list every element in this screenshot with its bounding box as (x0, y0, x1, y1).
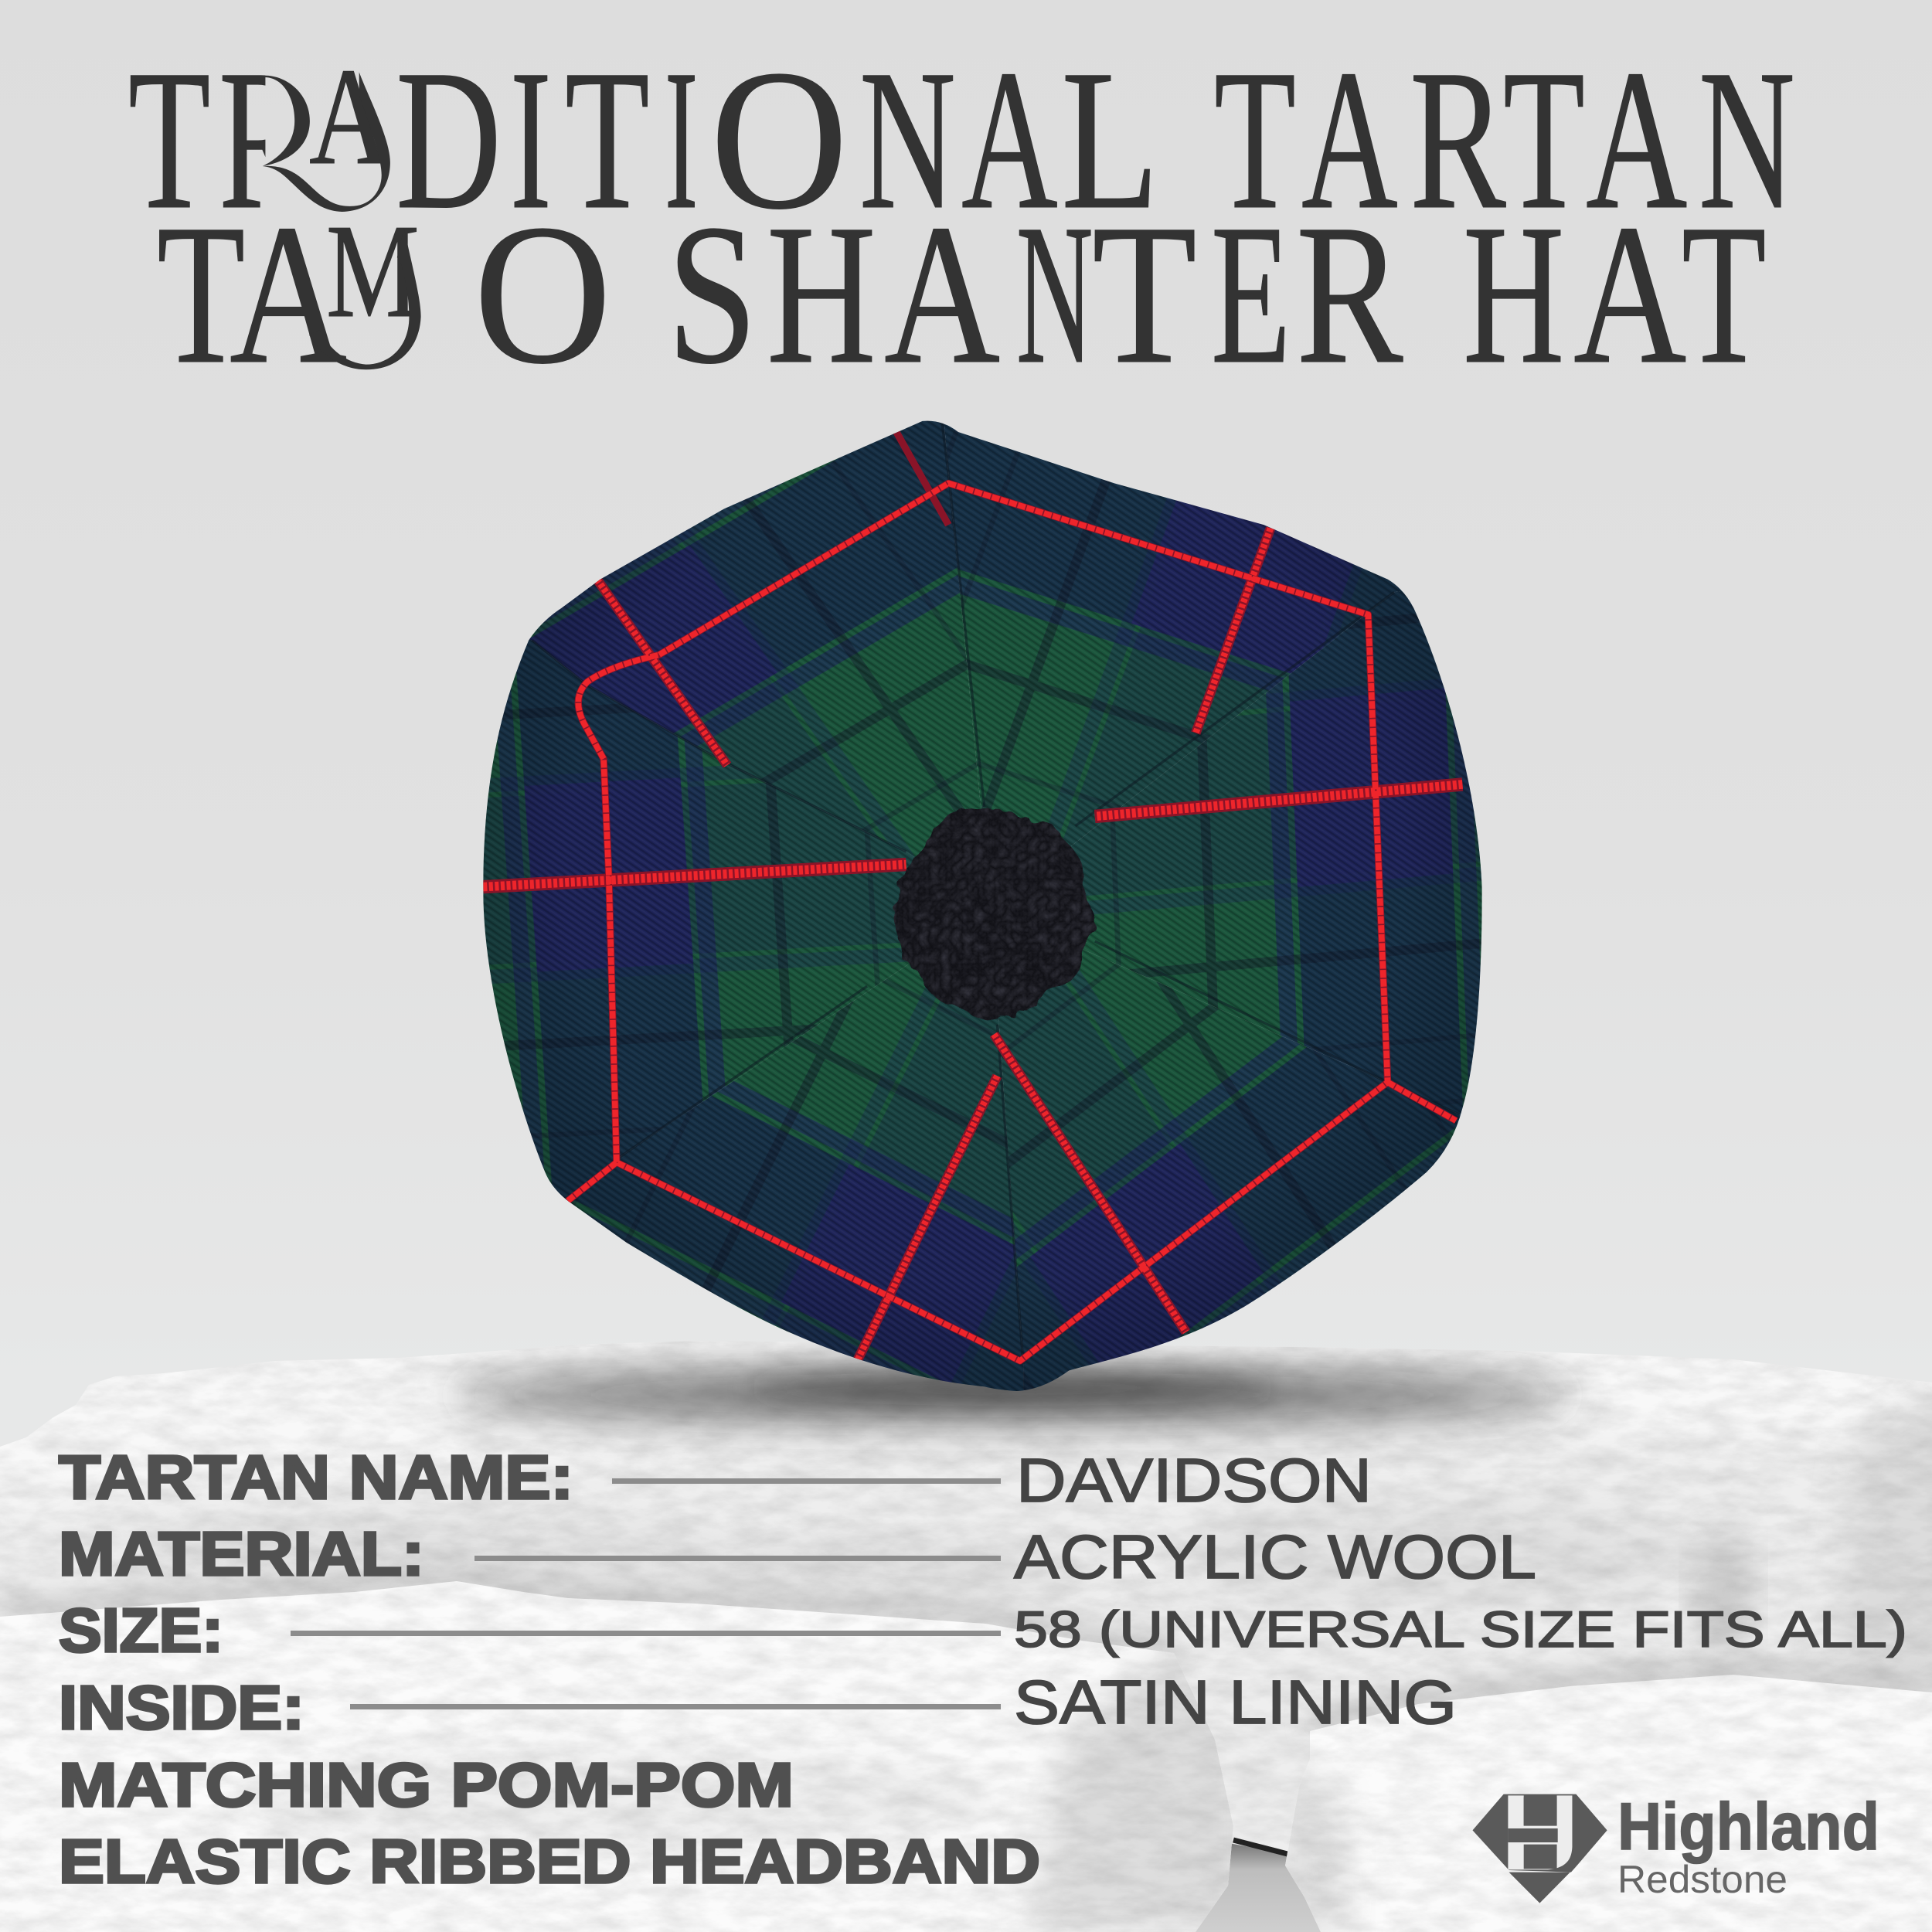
title line 1: R (1410, 29, 1506, 251)
values: SATIN LINING (1014, 1668, 1457, 1736)
title line 1: T (128, 29, 210, 251)
title line 2: M (326, 196, 420, 345)
values: 58 (UNIVERSAL SIZE FITS ALL) (1014, 1600, 1907, 1658)
labels (59, 1443, 1040, 1896)
title line 1: T (1214, 29, 1296, 251)
title line 1: N (859, 29, 956, 251)
title line 1: O (710, 29, 848, 251)
icon: diamond HJ monogram (1472, 1794, 1607, 1903)
spec table (59, 1443, 1907, 1896)
rock: front left block (0, 1577, 1252, 1932)
labels: ELASTIC RIBBED HEADBAND (59, 1827, 1040, 1896)
title line 2: R (1296, 183, 1403, 406)
title line 1: D (396, 29, 502, 251)
title line 1: T (1503, 29, 1585, 251)
title line 2: E (1211, 183, 1291, 406)
title line 1: T (565, 29, 650, 251)
title line 1: I (510, 29, 552, 251)
title line 2: T (157, 183, 245, 406)
title line 2: T (1682, 183, 1767, 406)
red tartan lines (483, 432, 1462, 1380)
title line 2: A (1573, 183, 1686, 406)
title line 1: R (219, 29, 308, 251)
title line 1: A (961, 29, 1058, 251)
title line 2: H (767, 183, 876, 406)
hat shadow on rock (448, 1372, 1577, 1418)
title line 1 (128, 29, 1795, 251)
labels: SIZE: (59, 1596, 223, 1665)
logo: Highland Redstone (1472, 1790, 1879, 1903)
title line 2 (157, 183, 1767, 406)
tam o shanter hat (483, 420, 1482, 1391)
values: DAVIDSON (1016, 1446, 1372, 1515)
values: ACRYLIC WOOL (1014, 1522, 1536, 1591)
title (128, 29, 1795, 406)
wordmark: Highland (1617, 1790, 1879, 1864)
rock: front right block (1275, 1669, 1932, 1932)
rock: floor and gap (1190, 1840, 1333, 1932)
rock pedestal (0, 1314, 1932, 1932)
title line 1: L (1061, 29, 1159, 251)
title line 1: A (1301, 29, 1398, 251)
labels: MATERIAL: (59, 1519, 424, 1588)
title line 2: H (1463, 183, 1564, 406)
title line 2: S (667, 183, 757, 406)
title line 2: N (1016, 183, 1094, 406)
title line 2: O (474, 183, 611, 406)
labels: MATCHING POM-POM (59, 1750, 794, 1819)
title line 1: A (309, 39, 389, 193)
hat seams (532, 423, 1459, 1364)
rock: back slab (0, 1341, 1932, 1790)
leader lines (291, 1478, 1001, 1709)
title line 1: I (665, 29, 698, 251)
pom-pom (895, 808, 1093, 1016)
values (1014, 1446, 1907, 1736)
hat panels (483, 420, 1482, 1391)
title line 2: A (884, 183, 1000, 406)
logo: Highland Redstone: Redstone (1617, 1858, 1787, 1901)
title line 1: N (1699, 29, 1795, 251)
labels: TARTAN NAME: (59, 1443, 573, 1512)
title line 1: A (1586, 29, 1687, 251)
title line 2: A (230, 183, 347, 406)
title swash flourishes (263, 72, 421, 369)
title line 2: T (1092, 183, 1197, 406)
labels: INSIDE: (59, 1673, 304, 1742)
cloth texture and edge shading (464, 410, 1505, 1434)
